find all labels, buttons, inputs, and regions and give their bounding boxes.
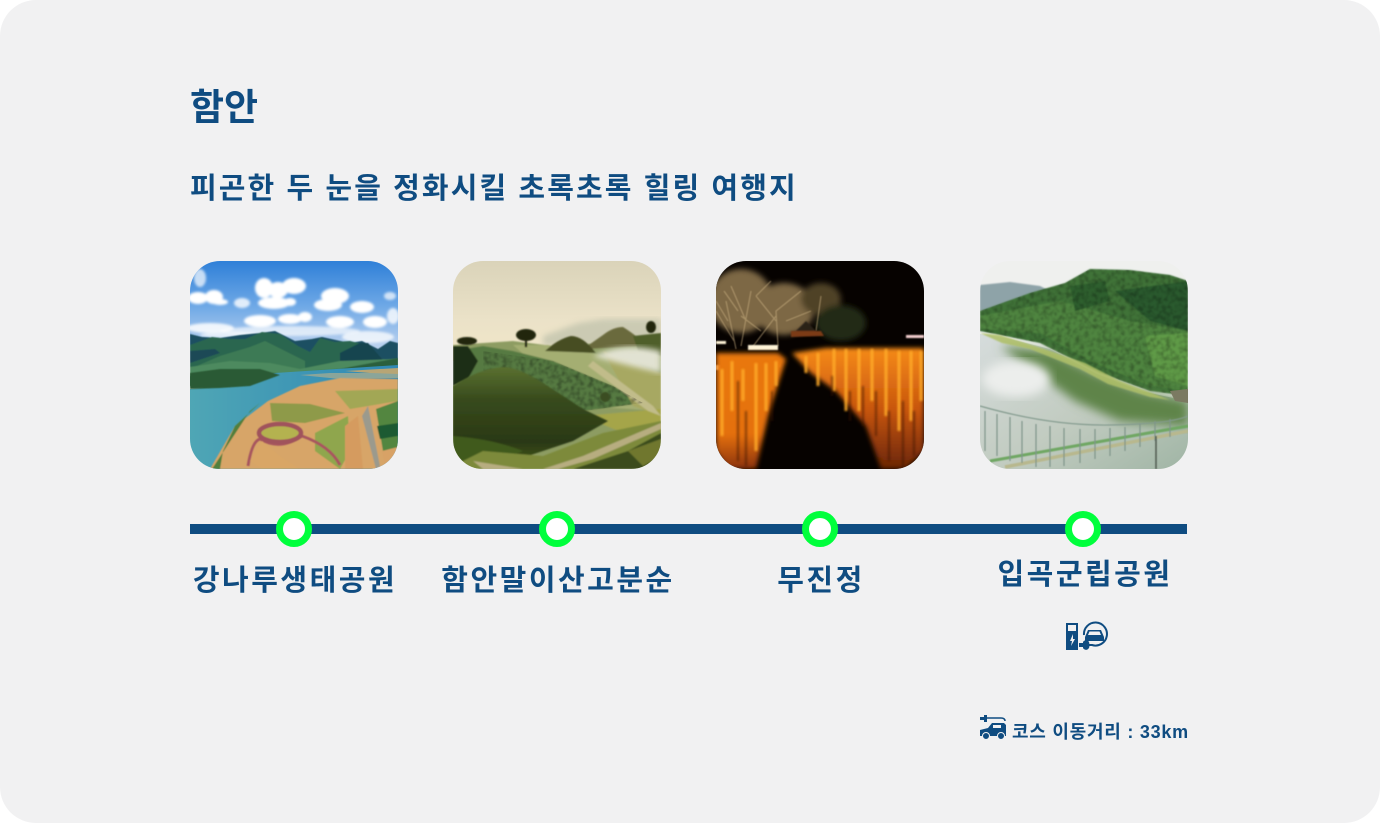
title: 함안 [190,87,258,128]
photo: 함안말이산고분군 misty burial mounds [453,261,661,469]
label: stop 1: 강나루생태공원 [193,565,397,597]
photo: 무진정 pavilion with night reflections [716,261,924,469]
label: stop 3: 무진정 [777,565,865,597]
icon: EV charging station [1066,622,1108,650]
label: stop 2: 함안말이산고분순 [441,565,675,597]
stop marker 4 [1065,511,1101,547]
course distance text: 코스 이동거리 : 33km [1012,722,1189,742]
label: stop 4: 입곡군립공원 [997,559,1173,591]
subtitle: 피곤한 두 눈을 정화시킬 초록초록 힐링 여행지 [190,173,798,205]
stop marker 2 [539,511,575,547]
photo: 입곡군립공원 lake, forest and suspension bridge [980,268,1188,469]
timeline bar [190,524,1187,534]
timeline [190,511,1187,547]
photo: 강나루생태공원 aerial park and river [190,261,398,469]
icon: electric car [980,715,1006,739]
stop marker 3 [802,511,838,547]
stop marker 1 [276,511,312,547]
